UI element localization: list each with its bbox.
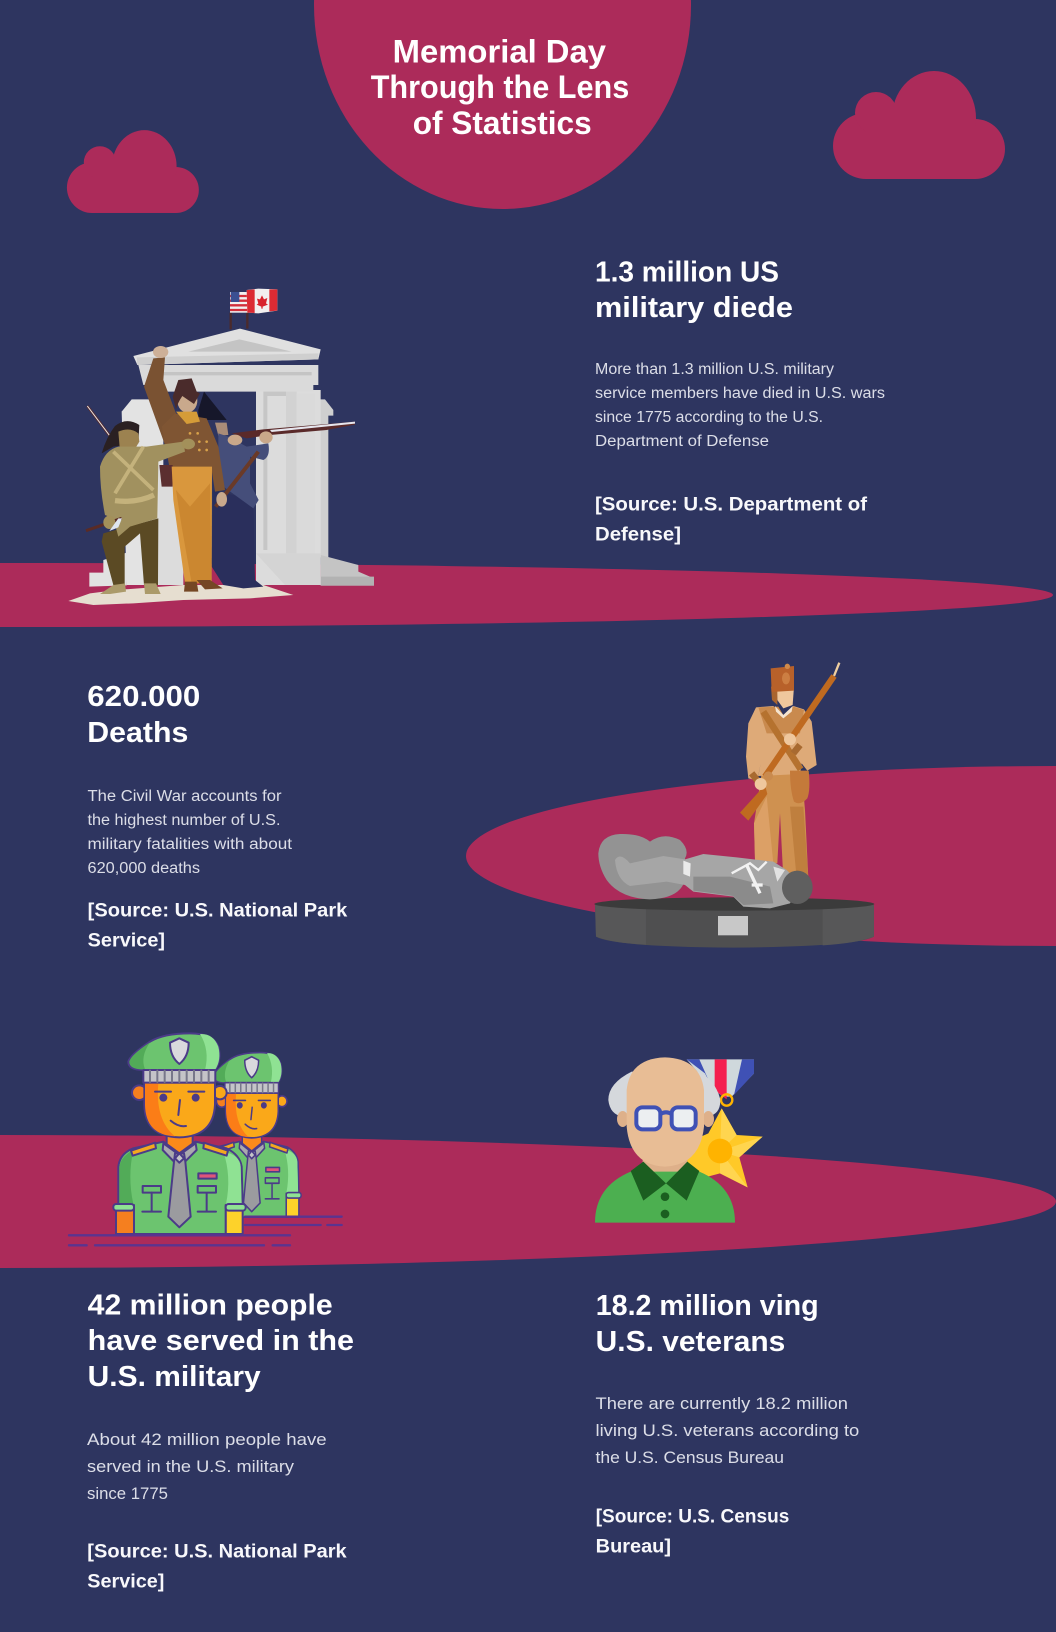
source: [Source: U.S. National Park: [87, 1541, 347, 1563]
hair: [608, 1072, 720, 1117]
ground lines: [69, 1217, 342, 1245]
illustration: veteran with medal: [595, 1057, 763, 1223]
heading: [596, 1290, 819, 1358]
body text: More than 1.3 million U.S. military: [595, 361, 834, 378]
panel: living veterans: [595, 1057, 859, 1558]
body text: [596, 1394, 859, 1467]
body text: the highest number of U.S.: [88, 812, 280, 829]
heading: 1.3 million US: [595, 256, 779, 288]
swoosh band 2: [466, 766, 1056, 946]
title: of Statistics: [413, 105, 592, 141]
icon: flags: [230, 289, 277, 329]
body text: The Civil War accounts for: [88, 788, 282, 805]
glasses: [636, 1107, 696, 1129]
title: Through the Lens: [371, 69, 629, 105]
source: [88, 900, 347, 952]
fallen soldier statue: [598, 834, 813, 908]
panel: military deaths: [68, 256, 885, 605]
swoosh band 1: [0, 563, 1053, 627]
source: Defense]: [595, 524, 681, 546]
body text: 620,000 deaths: [88, 860, 200, 877]
body text: [88, 788, 293, 877]
icon: medal: [687, 1059, 763, 1187]
source: [Source: U.S. National Park: [88, 900, 347, 922]
swoosh band 3: [0, 1135, 1056, 1268]
panel: civil war deaths: [87, 663, 874, 952]
heading: U.S. veterans: [596, 1326, 785, 1358]
buttons: [661, 1192, 669, 1218]
standing soldier: [740, 663, 839, 878]
title: Memorial Day: [393, 34, 606, 70]
heading: have served in the: [88, 1325, 354, 1357]
collar: [631, 1162, 699, 1201]
illustration: soldier statue over fallen soldier: [594, 663, 874, 948]
source: [596, 1506, 789, 1558]
heading: 18.2 million ving: [596, 1290, 819, 1322]
body text: There are currently 18.2 million: [596, 1394, 848, 1413]
source: [87, 1541, 347, 1593]
body text: served in the U.S. military: [87, 1457, 295, 1476]
figure: frontier man: [86, 406, 195, 594]
illustration: monument and three soldiers: [68, 289, 374, 605]
shirt: [595, 1172, 735, 1223]
heading: 620.000: [87, 681, 200, 713]
body text: [595, 361, 885, 450]
source: [595, 494, 868, 546]
ears: [617, 1111, 714, 1127]
heading: 42 million people: [88, 1289, 333, 1321]
body text: the U.S. Census Bureau: [596, 1448, 784, 1467]
icon: right cloud: [833, 71, 1005, 179]
source: [Source: U.S. Census: [596, 1506, 789, 1528]
pedestal: [594, 897, 874, 948]
front soldier: [113, 1033, 246, 1234]
neck: [643, 1150, 687, 1185]
source: Service]: [87, 1571, 164, 1593]
heading: [88, 1289, 354, 1393]
title: [371, 34, 629, 141]
head: [627, 1057, 704, 1167]
figure: soldier with rifle: [198, 392, 355, 588]
ground sheet: [68, 585, 293, 605]
monument: [89, 329, 374, 587]
icon: left cloud: [67, 130, 199, 213]
title badge: [314, 0, 691, 209]
back soldier: [203, 1053, 301, 1217]
body text: service members have died in U.S. wars: [595, 385, 885, 402]
body text: Department of Defense: [595, 433, 769, 450]
heading: U.S. military: [88, 1361, 261, 1393]
body text: since 1775: [87, 1484, 168, 1503]
heading: [595, 256, 793, 324]
figure: central man with raised fist: [144, 346, 227, 592]
body text: [87, 1430, 327, 1503]
illustration: two uniformed soldiers: [69, 1033, 342, 1245]
body text: living U.S. veterans according to: [596, 1421, 859, 1440]
body text: since 1775 according to the U.S.: [595, 409, 823, 426]
heading: [87, 681, 200, 749]
source: Service]: [88, 930, 165, 952]
source: [Source: U.S. Department of: [595, 494, 868, 516]
source: Bureau]: [596, 1536, 671, 1558]
body text: About 42 million people have: [87, 1430, 327, 1449]
heading: military diede: [595, 292, 793, 324]
body text: military fatalities with about: [88, 836, 293, 853]
panel: people served: [69, 1033, 354, 1593]
heading: Deaths: [87, 717, 188, 749]
